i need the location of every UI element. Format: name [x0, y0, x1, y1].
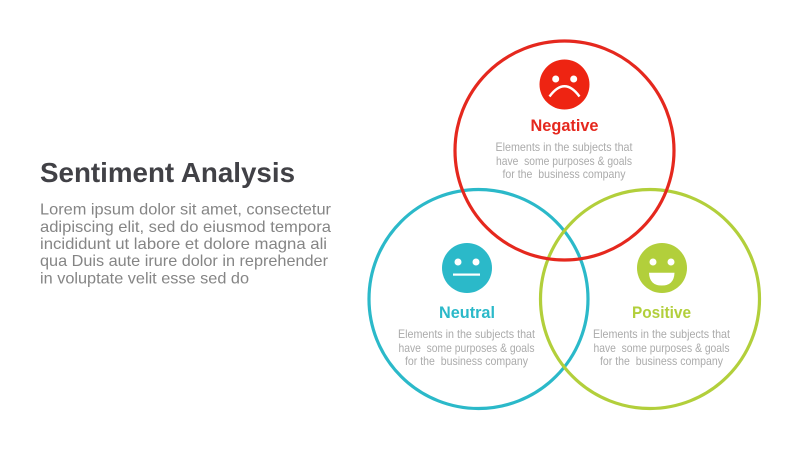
title: Sentiment Analysis: [40, 157, 295, 188]
text: neutral description: [398, 327, 536, 368]
icon: sad face: [540, 60, 590, 110]
circle: negative outline: [455, 41, 674, 260]
description text block: qua Duis aute irure dolor in reprehender: [40, 253, 329, 270]
text: neutral description: for the business company: [405, 354, 528, 368]
text: neutral description: have some purposes & goals: [398, 341, 534, 355]
icon: happy face: [637, 243, 687, 293]
description text block: [40, 202, 332, 288]
text: positive description: [593, 327, 731, 368]
description text block: Lorem ipsum dolor sit amet, consectetur: [40, 202, 332, 218]
circle: positive outline: [540, 190, 760, 408]
text: negative description: for the business company: [502, 167, 626, 181]
text: positive description: for the business company: [600, 354, 723, 368]
text: negative description: [496, 140, 633, 181]
text: positive description: have some purposes & goals: [594, 341, 730, 355]
text: positive description: Elements in the subjects that: [593, 327, 731, 341]
panel: positive: [593, 243, 731, 368]
text: negative description: Elements in the subjects that: [496, 140, 633, 154]
heading: positive: Positive: [632, 304, 691, 322]
heading: neutral: Neutral: [439, 304, 495, 322]
circle: neutral outline: [369, 190, 588, 408]
heading: negative: Negative: [530, 117, 598, 135]
text: negative description: have some purposes & goals: [496, 154, 632, 168]
panel: neutral: [398, 243, 536, 368]
panel: negative: [496, 60, 633, 181]
description text block: in voluptate velit esse sed do: [40, 270, 249, 288]
text: neutral description: Elements in the subjects that: [398, 327, 536, 341]
icon: neutral face: [442, 243, 492, 293]
description text block: adipiscing elit, sed do eiusmod tempora: [40, 219, 331, 236]
description text block: incididunt ut labore et dolore magna ali: [40, 236, 327, 253]
